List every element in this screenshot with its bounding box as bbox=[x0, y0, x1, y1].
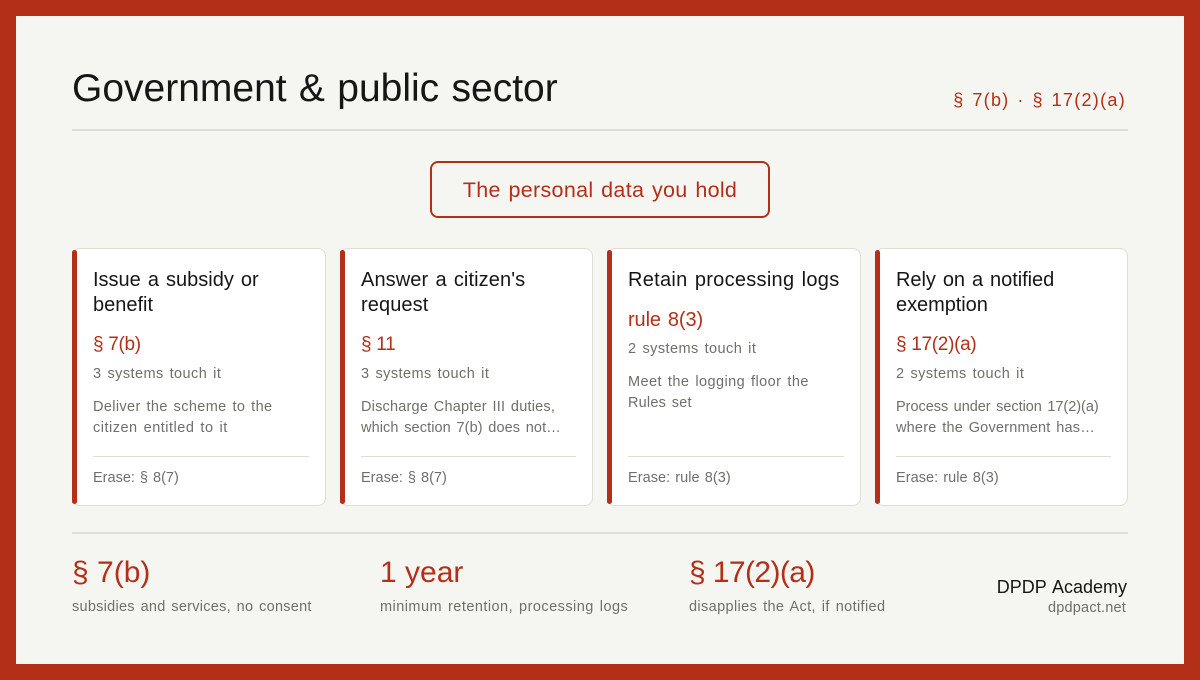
card heading: Rely on a notified bbox=[896, 269, 1054, 291]
stat: section 17(2)(a): § 17(2)(a) bbox=[689, 556, 815, 589]
brand url: dpdpact.net bbox=[1048, 600, 1126, 616]
card heading: exemption bbox=[896, 294, 988, 316]
description: Process under section 17(2)(a) bbox=[896, 399, 1099, 415]
callout: the personal data you hold bbox=[430, 161, 770, 218]
systems count: 2 systems touch it bbox=[896, 366, 1024, 382]
systems count: 2 systems touch it bbox=[628, 341, 756, 357]
card heading bbox=[361, 269, 525, 316]
card heading: Answer a citizen's bbox=[361, 269, 525, 291]
card heading bbox=[93, 269, 259, 316]
description bbox=[628, 374, 809, 411]
description bbox=[361, 399, 561, 436]
section tag: § 11 bbox=[361, 334, 395, 355]
panel: answer a citizen's request card bbox=[340, 248, 593, 506]
description: citizen entitled to it bbox=[93, 420, 228, 436]
description: Discharge Chapter III duties, bbox=[361, 399, 555, 415]
card heading bbox=[896, 269, 1054, 316]
erase rule: Erase: rule 8(3) bbox=[896, 470, 999, 486]
title: Government & public sector bbox=[72, 67, 558, 110]
card heading: benefit bbox=[93, 294, 153, 316]
description: Deliver the scheme to the bbox=[93, 399, 272, 415]
section tag: § 7(b) bbox=[93, 334, 141, 355]
brand name: DPDP Academy bbox=[997, 577, 1127, 597]
erase rule: Erase: § 8(7) bbox=[93, 470, 179, 486]
description: Meet the logging floor the bbox=[628, 374, 809, 390]
card heading: request bbox=[361, 294, 428, 316]
stat caption: subsidies and services, no consent bbox=[72, 599, 312, 615]
stat: 1 year: 1 year bbox=[380, 556, 463, 589]
description: which section 7(b) does not… bbox=[361, 420, 561, 436]
stat caption: disapplies the Act, if notified bbox=[689, 599, 885, 615]
stat caption: minimum retention, processing logs bbox=[380, 599, 628, 615]
callout: the personal data you hold: The personal data you hold bbox=[463, 178, 737, 202]
description bbox=[93, 399, 272, 436]
panel: issue a subsidy card bbox=[72, 248, 326, 506]
panel: retain processing logs card bbox=[607, 248, 861, 506]
section tag: § 17(2)(a) bbox=[896, 334, 976, 355]
stat: section 7(b): § 7(b) bbox=[72, 556, 150, 589]
systems count: 3 systems touch it bbox=[361, 366, 489, 382]
panel: rely on a notified exemption card bbox=[875, 248, 1128, 506]
description: where the Government has… bbox=[896, 420, 1095, 436]
description bbox=[896, 399, 1099, 436]
section tag: rule 8(3) bbox=[628, 309, 703, 331]
section reference: § 7(b) · § 17(2)(a) bbox=[953, 90, 1126, 110]
card heading: Retain processing logs bbox=[628, 269, 840, 291]
description: Rules set bbox=[628, 395, 692, 411]
systems count: 3 systems touch it bbox=[93, 366, 221, 382]
erase rule: Erase: § 8(7) bbox=[361, 470, 447, 486]
erase rule: Erase: rule 8(3) bbox=[628, 470, 731, 486]
card heading: Issue a subsidy or bbox=[93, 269, 259, 291]
